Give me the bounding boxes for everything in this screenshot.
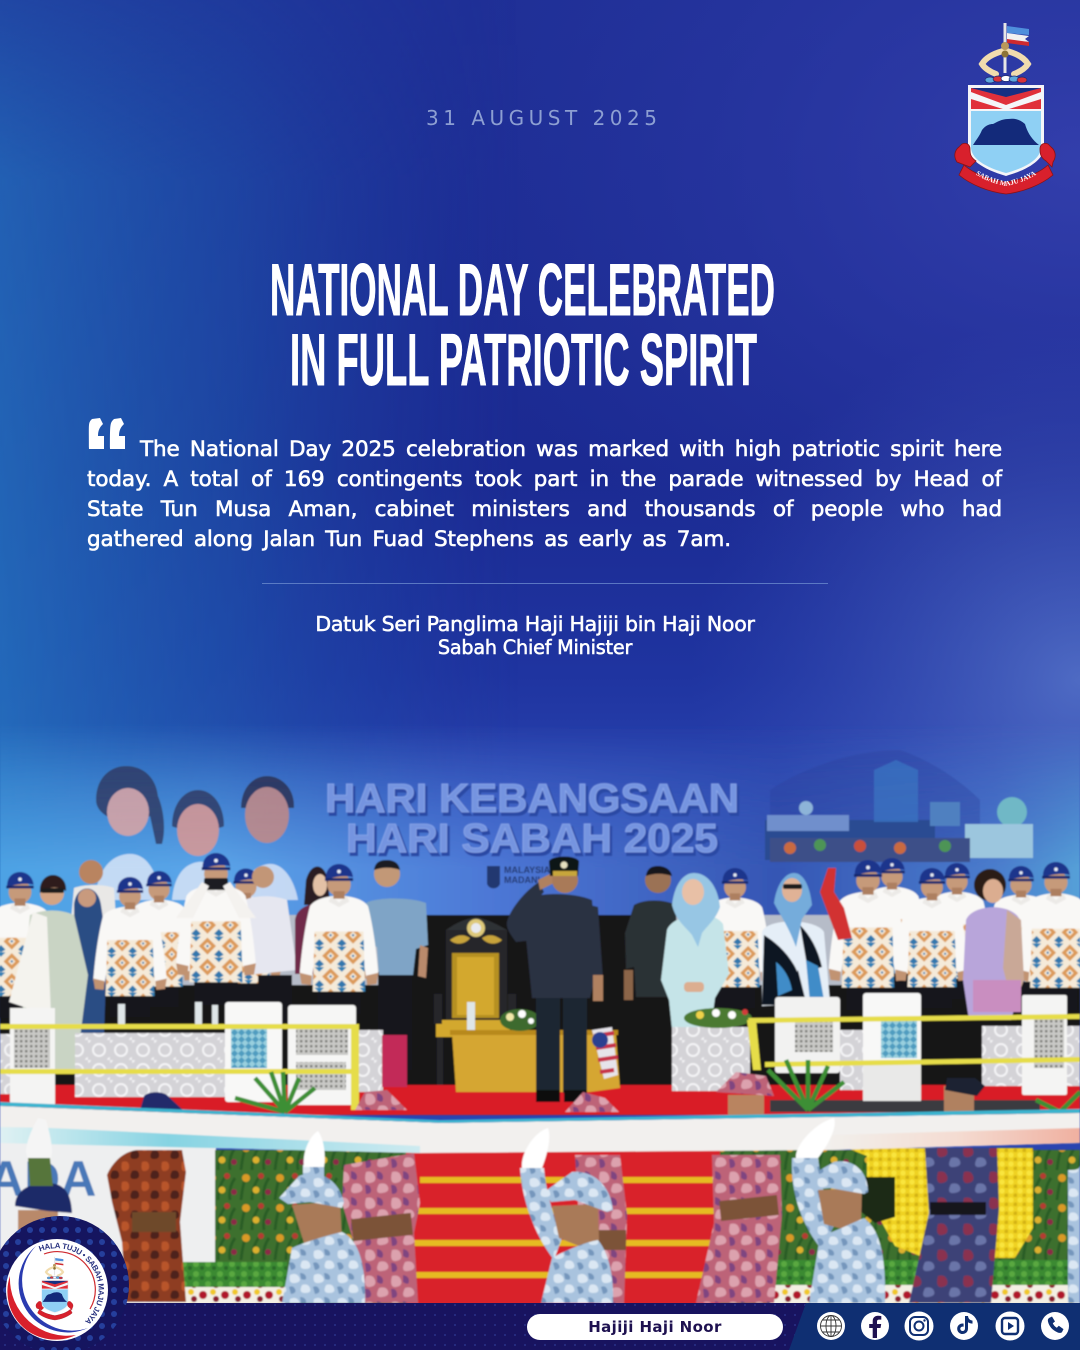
icon: instagram xyxy=(904,1312,934,1340)
quote body: gathered along Jalan Tun Fuad Stephens as early as 7am. xyxy=(87,527,731,552)
man in shirt behind xyxy=(245,866,297,1025)
woman in pale blue hijab xyxy=(661,873,729,1058)
man in dark shirt xyxy=(624,866,678,1075)
name pill: Hajiji Haji Noor xyxy=(588,1318,722,1336)
lower scene behind beam xyxy=(0,1140,1080,1305)
flower garden left xyxy=(215,1150,415,1305)
red-uniform soldiers xyxy=(107,1148,999,1305)
stage backdrop xyxy=(0,736,1080,916)
quote mark xyxy=(89,418,125,449)
man in blue shirt xyxy=(364,860,428,1070)
headline xyxy=(270,250,775,401)
gold table xyxy=(452,1034,620,1092)
flower arrangements xyxy=(500,1009,540,1031)
attribution: Sabah Chief Minister xyxy=(438,636,632,659)
tables xyxy=(0,1002,1080,1097)
madani logo xyxy=(487,865,551,888)
city skyline xyxy=(765,750,1033,862)
date: 31 AUGUST 2025 xyxy=(426,106,657,130)
parade soldiers behind beam xyxy=(140,1072,985,1115)
footer bar xyxy=(0,1303,1080,1350)
officials on stage, back row xyxy=(0,858,1057,1035)
soldier 2 xyxy=(520,1128,613,1303)
backdrop headline: HARI KEBANGSAAN xyxy=(325,775,739,821)
quote body: today. A total of 169 contingents took part in the parade witnessed by Head of xyxy=(87,467,1002,492)
stair stripes xyxy=(410,1177,718,1278)
backdrop headline: HARI KEBANGSAAN xyxy=(327,778,741,824)
icon: phone xyxy=(1041,1312,1069,1340)
backdrop headline xyxy=(325,775,741,864)
icon: youtube play xyxy=(996,1312,1024,1340)
yellow floral number xyxy=(847,1148,1033,1258)
soldier 3 xyxy=(792,1118,885,1303)
pale camo soldiers marching xyxy=(15,1118,1080,1303)
saluting chief minister xyxy=(507,856,603,1102)
white signboard xyxy=(0,1140,216,1305)
crowd fill behind officials xyxy=(0,915,1080,1090)
throne xyxy=(434,917,516,1087)
bottles xyxy=(118,1002,475,1030)
divider xyxy=(262,583,828,584)
backdrop headline: HARI SABAH 2025 xyxy=(348,818,720,864)
woman behind xyxy=(295,866,330,974)
potted plants xyxy=(235,1060,1080,1112)
crest motto: SABAH MAJU JAYA xyxy=(976,171,1036,186)
hala tuju badge xyxy=(0,1216,129,1350)
madani logo: MADANI xyxy=(504,875,540,885)
woman in floral dress xyxy=(963,869,1024,1020)
woman hijab behind xyxy=(74,888,107,1035)
icon: tiktok xyxy=(950,1312,978,1340)
quote body xyxy=(87,437,1003,552)
name pill xyxy=(527,1314,783,1340)
event photo xyxy=(0,700,1080,1305)
backdrop headline: HARI SABAH 2025 xyxy=(346,815,718,861)
badge motto: HALA TUJU • SABAH MAJU JAYA xyxy=(38,1242,104,1324)
icon: facebook xyxy=(861,1312,889,1340)
quote body: The National Day 2025 celebration was marked with high patriotic spirit here xyxy=(140,437,1002,462)
attribution xyxy=(315,612,756,659)
madani logo: MALAYSIA xyxy=(504,865,551,875)
soldier 4 edge xyxy=(1068,1165,1080,1303)
white beam xyxy=(0,1102,1080,1153)
man behind, white shirt xyxy=(70,860,116,930)
woman in white cardigan xyxy=(9,875,88,1070)
soldier 1 xyxy=(279,1131,365,1303)
icon: website globe xyxy=(817,1312,845,1340)
malaysian flag drape xyxy=(592,1027,618,1079)
red floor xyxy=(0,1085,1080,1115)
sabah crest top right xyxy=(954,23,1056,194)
yellow rope barriers xyxy=(0,1014,1080,1110)
quote body: State Tun Musa Aman, cabinet ministers and thousands of people who had xyxy=(87,497,1002,522)
woman in patterned dress xyxy=(762,868,852,1006)
officials on stage, front row xyxy=(93,853,1080,1017)
official with phone xyxy=(176,853,256,1005)
corner soldier xyxy=(15,1183,72,1250)
attribution: Datuk Seri Panglima Haji Hajiji bin Haji Noor xyxy=(315,612,755,636)
red staircase xyxy=(406,1150,724,1305)
air coolers xyxy=(10,993,1067,1106)
children on backdrop xyxy=(95,766,298,900)
badge crest xyxy=(36,1257,73,1320)
garden right xyxy=(720,1150,1080,1305)
